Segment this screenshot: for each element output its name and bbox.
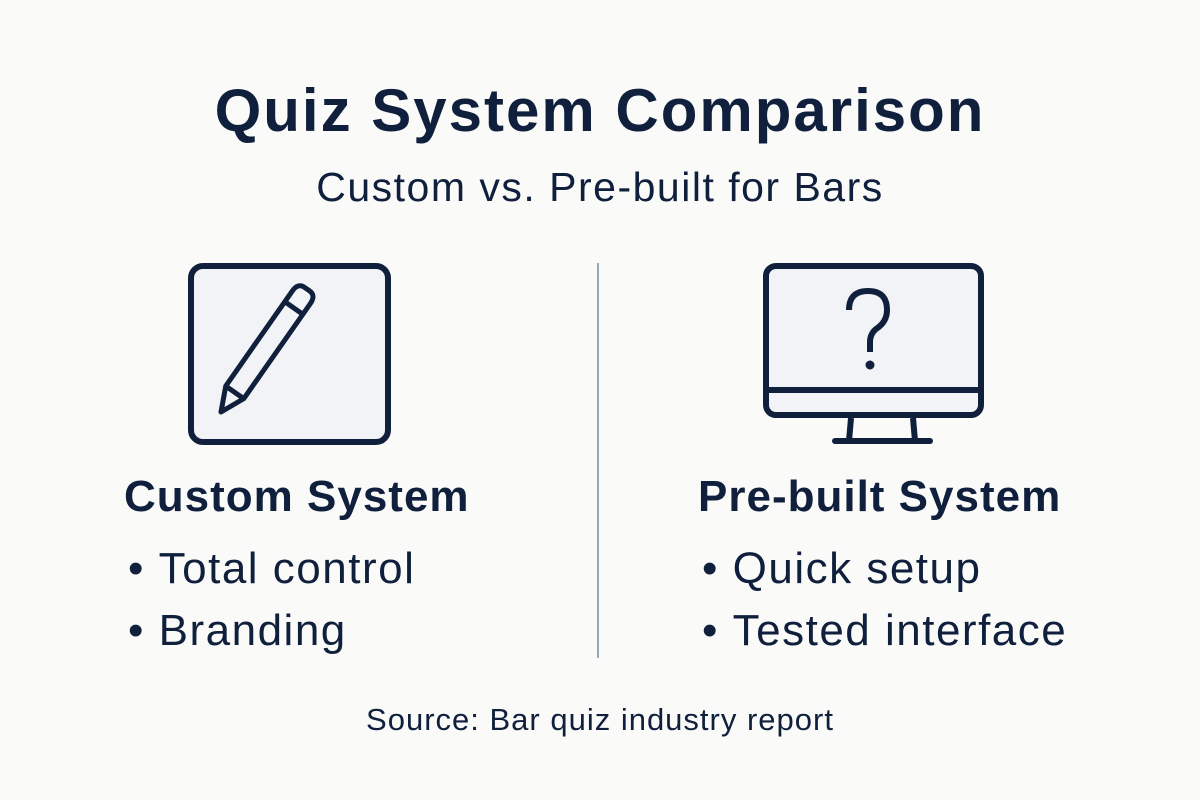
bullet list: custom: • Total control xyxy=(128,544,415,593)
heading: pre-built: Pre-built System xyxy=(698,472,1061,521)
heading: custom: Custom System xyxy=(124,472,470,521)
bullet list: custom xyxy=(128,544,415,655)
panel: pre-built xyxy=(698,472,1067,655)
bullet list: pre-built: • Tested interface xyxy=(702,606,1067,655)
bullet list: pre-built xyxy=(702,544,1067,655)
bullet list: custom: • Branding xyxy=(128,606,347,655)
bullet list: pre-built: • Quick setup xyxy=(702,544,981,593)
panel: custom xyxy=(124,472,470,655)
subtitle: Custom vs. Pre-built for Bars xyxy=(316,164,884,210)
icon: pencil box xyxy=(188,263,391,445)
divider xyxy=(597,263,599,658)
source note: Source: Bar quiz industry report xyxy=(366,702,834,737)
title: Quiz System Comparison xyxy=(215,77,985,144)
icon: monitor with question mark xyxy=(763,263,984,444)
